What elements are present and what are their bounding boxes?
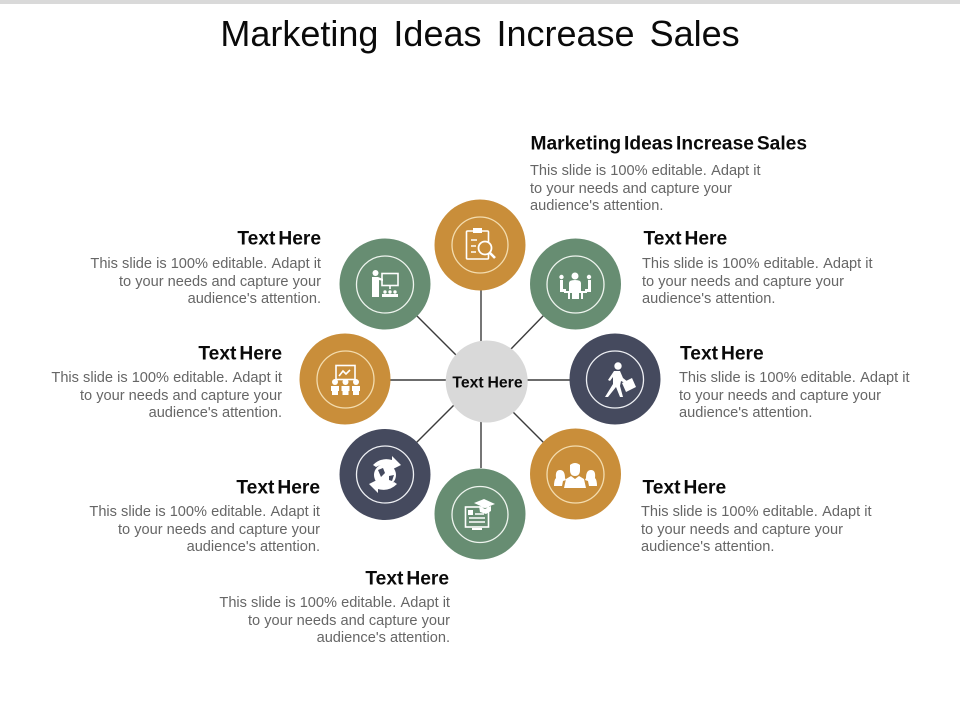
text: right: This slide is 100% editable. Adapt it (679, 370, 910, 386)
title: Marketing Ideas Increase Sales (220, 13, 740, 54)
text: upper left: to your needs and capture your (119, 274, 321, 290)
text: upper right (642, 229, 873, 307)
text: left (51, 344, 282, 421)
center hub: Text Here (452, 374, 523, 392)
text: bottom (219, 569, 450, 646)
text: lower left: audience's attention. (187, 539, 320, 555)
text: lower left (89, 478, 320, 555)
center hub (446, 340, 528, 422)
text: upper left: This slide is 100% editable. Adapt it (90, 256, 321, 272)
node: top clipboard search (434, 200, 526, 290)
text: upper right: audience's attention. (642, 291, 775, 307)
text: right: audience's attention. (679, 405, 812, 421)
text: lower right: to your needs and capture your (641, 522, 843, 538)
node: right walking person (570, 334, 660, 424)
text: upper left: Text Here (237, 229, 321, 250)
text: bottom: audience's attention. (317, 630, 450, 646)
text: lower right: Text Here (642, 478, 726, 499)
node: lower left globe arrows (340, 429, 430, 520)
text: upper right: Text Here (644, 229, 727, 250)
connector lines (390, 290, 660, 468)
node: upper left presenter (340, 238, 430, 330)
text: top right: This slide is 100% editable. Adapt it (530, 163, 761, 179)
text: right: to your needs and capture your (679, 388, 881, 404)
text: upper left: audience's attention. (188, 291, 321, 307)
text: lower right (641, 478, 872, 555)
text: top right: Marketing Ideas Increase Sales (530, 134, 807, 155)
text: lower left: Text Here (236, 478, 320, 499)
text: lower right: audience's attention. (641, 539, 774, 555)
text: left: This slide is 100% editable. Adapt it (51, 370, 282, 386)
node: lower right women group (530, 428, 621, 520)
node: upper right meeting (530, 238, 621, 330)
text: top right: to your needs and capture your (530, 181, 732, 197)
text: right: Text Here (680, 344, 764, 365)
text: left: Text Here (198, 344, 282, 365)
text: upper right: This slide is 100% editable. Adapt it (642, 256, 873, 272)
text: bottom: Text Here (365, 569, 449, 590)
text: right (679, 344, 910, 421)
text: top right (530, 134, 807, 214)
text: lower left: This slide is 100% editable. Adapt it (89, 504, 320, 520)
text: top right: audience's attention. (530, 198, 663, 214)
text: lower left: to your needs and capture your (118, 522, 320, 538)
text: bottom: to your needs and capture your (248, 613, 450, 629)
node: bottom certificate graduate (434, 468, 526, 560)
text: lower right: This slide is 100% editable. Adapt it (641, 504, 872, 520)
text: left: audience's attention. (149, 405, 282, 421)
text: upper left (90, 229, 321, 307)
text: left: to your needs and capture your (80, 388, 282, 404)
text: upper right: to your needs and capture your (642, 274, 844, 290)
node: left audience chart (300, 334, 390, 424)
text: bottom: This slide is 100% editable. Adapt it (219, 595, 450, 611)
